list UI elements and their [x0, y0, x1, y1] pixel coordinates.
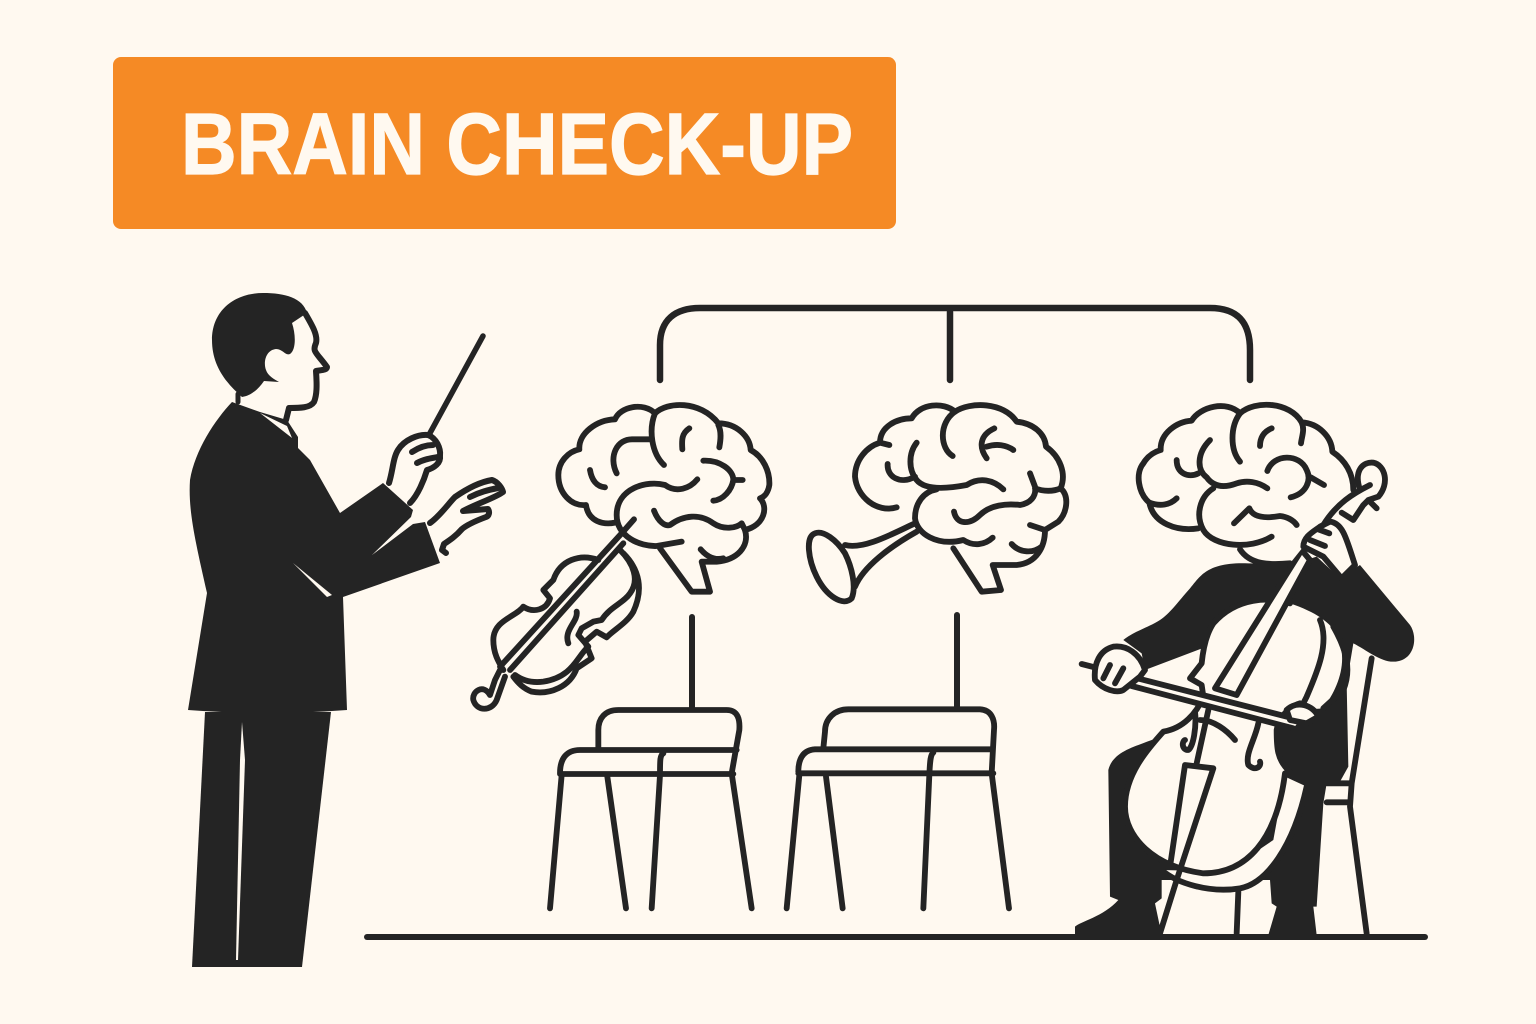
- title banner: BRAIN CHECK-UP: [181, 96, 853, 193]
- cellist with brain head: [1075, 405, 1414, 935]
- cello bridge and f-holes: [1183, 710, 1260, 768]
- violin: [473, 519, 639, 709]
- cello head and scroll, brain and neck hand: [1240, 540, 1303, 565]
- title banner: [113, 57, 896, 229]
- connectors to empty chairs: [692, 615, 957, 708]
- top connector bracket: [660, 308, 1250, 380]
- brain with trumpet: [809, 405, 1066, 601]
- bow and bowing hand: [1082, 664, 1300, 728]
- raised hand holding baton: [389, 435, 440, 503]
- conductor figure: [188, 293, 503, 967]
- empty chair right: [787, 709, 1009, 908]
- trumpet: [809, 523, 917, 601]
- empty chair left: [550, 710, 752, 908]
- baton: [430, 336, 483, 433]
- cello neck: [1215, 550, 1310, 695]
- open left hand: [430, 480, 503, 553]
- stage floor: [367, 934, 1425, 940]
- brain with violin: [473, 405, 769, 709]
